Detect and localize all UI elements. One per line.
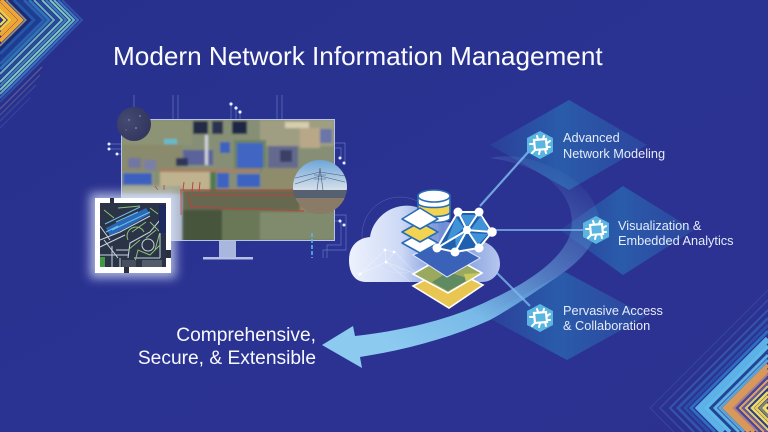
corner decoration: faint lines (0, 67, 42, 128)
cloud (349, 197, 500, 282)
panel: visualization diamond (560, 186, 694, 275)
label: advanced network modeling: Advanced (563, 130, 620, 145)
label: visualization and embedded analytics: Visualization & (618, 218, 702, 233)
icon: orange map layer (413, 268, 483, 308)
monitor with aerial image (115, 115, 340, 242)
dark globe circle (117, 107, 151, 141)
label: advanced network modeling: Network Modeling (563, 146, 665, 161)
monitor stand (203, 240, 253, 260)
icon: top outlined layer (413, 240, 480, 277)
label: visualization and embedded analytics: Embedded Analytics (618, 233, 734, 248)
power line photo circle (293, 160, 347, 214)
map inset (90, 193, 176, 278)
connector lines (480, 150, 585, 306)
callout: comprehensive, secure and extensible: Comprehensive, (176, 325, 316, 346)
title: Modern Network Information Management (113, 41, 603, 71)
icon: hexagon visualization (583, 216, 609, 244)
panel: pervasive access diamond (485, 272, 647, 360)
icon: stacked layers (402, 208, 438, 253)
icon: database (418, 190, 450, 222)
corner decoration: top-left chevrons (0, 0, 82, 102)
circuit decoration (109, 95, 346, 258)
circuit dots (108, 102, 346, 226)
icon: green map layer (413, 254, 482, 293)
dashed connector (311, 233, 313, 258)
corner decoration: bottom-right chevrons (650, 290, 768, 432)
label: pervasive access and collaboration: Pervasive Access (563, 303, 663, 318)
icon: network mesh (432, 208, 497, 256)
sweeping arrow (322, 156, 598, 368)
panel: advanced network modeling diamond (490, 100, 647, 190)
callout: comprehensive, secure and extensible: Secure, & Extensible (138, 348, 316, 369)
icon: hexagon advanced modeling (527, 131, 553, 159)
icon: hexagon pervasive access (527, 304, 553, 332)
label: pervasive access and collaboration: & Collaboration (563, 318, 650, 333)
